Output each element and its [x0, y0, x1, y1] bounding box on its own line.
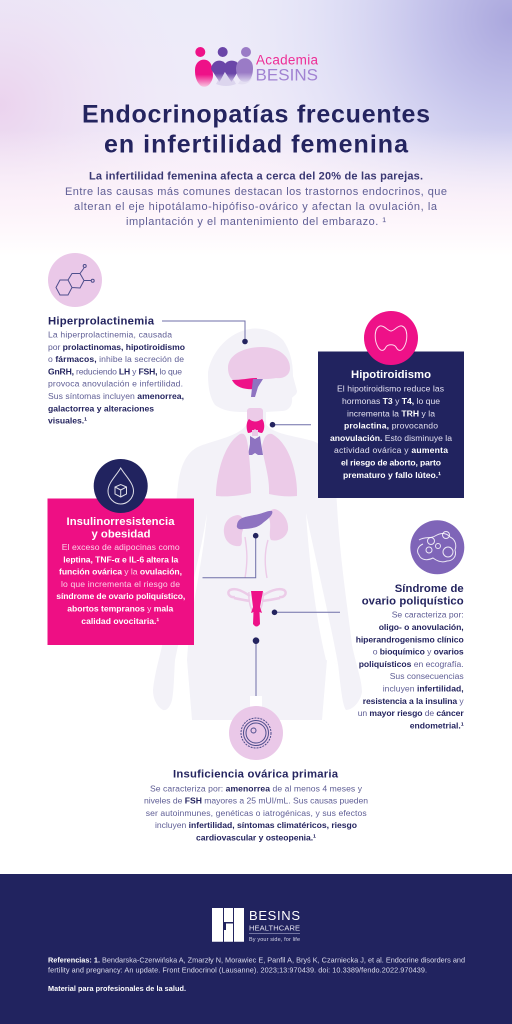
organ: lungs [216, 434, 297, 496]
body text [56, 542, 185, 626]
icon: drop with cube [94, 459, 148, 513]
intro text [65, 171, 447, 228]
panel: insulinorresistencia y obesidad [48, 459, 194, 645]
footer band [0, 874, 512, 1024]
body text: o bioquímico y ovarios [373, 647, 464, 657]
organ: thyroid and airways [247, 408, 264, 455]
body text: galactorrea y alteraciones [48, 403, 154, 413]
body text: función ovárica y la ovulación, [59, 567, 182, 577]
logo: Besins Healthcare [212, 908, 300, 943]
logo: Besins Healthcare: By your side, for life [249, 937, 300, 943]
body text: el riesgo de aborto, parto [341, 458, 441, 468]
body text: incluyen infertilidad, síntomas climatéricos, riesgo [155, 820, 357, 830]
body text [356, 610, 464, 730]
heading [362, 583, 464, 607]
body text: Sus consecuencias [390, 671, 464, 681]
body text: incrementa la TRH y la [347, 408, 435, 418]
organ: uterus [228, 589, 286, 626]
title: en infertilidad femenina [104, 130, 409, 158]
body text: El hipotiroidismo reduce las [337, 384, 444, 394]
references: Referencias: 1. Bendarska-Czerwińska A, Zmarzły N, Morawiec E, Panfil A, Bryś K, Czarniecka J, et al. Endocrine disorders and [48, 956, 465, 965]
connector: hipotiroidismo [270, 422, 311, 428]
body text [330, 384, 452, 480]
heading: Síndrome de [395, 583, 464, 595]
body text: anovulación. Esto disminuye la [330, 433, 452, 443]
body text: actividad ovárica y aumenta [334, 445, 448, 455]
panel: insuficiencia ovárica primaria [144, 706, 368, 842]
heading: y obesidad [92, 528, 151, 540]
connector: hiperprolactinemia [162, 321, 248, 344]
organ: brain [228, 347, 290, 397]
body text: provoca anovulación e infertilidad. [48, 379, 183, 389]
icon: thyroid [364, 311, 418, 365]
body text: Se caracteriza por: amenorrea de al menos 4 meses y [150, 783, 363, 793]
connector: síndrome de ovario poliquístico [272, 610, 340, 615]
body text: ser autoinmunes, genéticas o iatrogénicas, y sus efectos [146, 808, 367, 818]
body text: síndrome de ovario poliquístico, [56, 591, 185, 601]
heading: Insulinorresistencia [66, 516, 175, 528]
body text: cardiovascular y osteopenia.¹ [196, 832, 316, 842]
body text: por prolactinomas, hipotiroidismo [48, 342, 185, 352]
connector: insulinorresistencia [202, 533, 258, 578]
panel: síndrome de ovario poliquístico [356, 520, 464, 730]
body text: Sus síntomas incluyen amenorrea, [48, 391, 184, 401]
body text: lo que incrementa el riesgo de [61, 579, 180, 589]
logo: Besins Healthcare: BESINS [249, 908, 300, 923]
heading [66, 516, 175, 540]
logo: Academia Besins: Academia [256, 52, 318, 68]
body text: Se caracteriza por: [392, 610, 464, 620]
references [48, 956, 465, 974]
human body silhouette [153, 328, 362, 720]
intro text: Entre las causas más comunes destacan los trastornos endocrinos, que [65, 186, 447, 198]
body text [48, 330, 185, 426]
body text: prematuro y fallo lúteo.¹ [343, 470, 441, 480]
logo: Academia Besins: BESINS [256, 66, 318, 85]
title: Endocrinopatías frecuentes [82, 100, 430, 128]
heading: ovario poliquístico [362, 595, 464, 607]
body text: hormonas T3 y T4, lo que [342, 396, 440, 406]
icon: follicle [229, 706, 283, 760]
disclaimer: Material para profesionales de la salud. [48, 984, 186, 993]
body text: visuales.¹ [48, 416, 87, 426]
intro text: La infertilidad femenina afecta a cerca del 20% de las parejas. [89, 171, 423, 183]
body text [144, 783, 368, 842]
background gradient [0, 0, 512, 258]
body text: incluyen infertilidad, [383, 684, 464, 694]
body text: La hiperprolactinemia, causada [48, 330, 172, 340]
body text: prolactina, provocando [344, 421, 438, 431]
heading: Hiperprolactinemia [48, 315, 155, 327]
logo: Academia Besins [195, 47, 318, 87]
body text: o fármacos, inhibe la secreción de [48, 354, 184, 364]
body text: hiperandrogenismo clínico [356, 634, 464, 644]
body text: niveles de FSH mayores a 25 mUI/mL. Sus causas pueden [144, 796, 368, 806]
body text: resistencia a la insulina y [363, 696, 464, 706]
connector: insuficiencia ovárica [253, 637, 259, 696]
body text: poliquísticos en ecografía. [359, 659, 464, 669]
body text: un mayor riesgo de cáncer [358, 708, 464, 718]
panel: hipotiroidismo [318, 311, 464, 498]
body text: calidad ovocitaria.¹ [81, 616, 159, 626]
heading: Hipotiroidismo [351, 369, 431, 381]
icon: molecule [48, 253, 102, 307]
body text: GnRH, reduciendo LH y FSH, lo que [48, 366, 182, 376]
body text: El exceso de adipocinas como [62, 542, 180, 552]
body text: endometrial.¹ [410, 720, 464, 730]
logo: Besins Healthcare: HEALTHCARE [249, 924, 300, 932]
heading: Insuficiencia ovárica primaria [173, 769, 339, 781]
body text: abortos tempranos y mala [67, 604, 174, 614]
references: fertility and pregnancy: An update. Front Endocrinol (Lausanne). 2023;13:970439. doi: 10.3389/fendo.2022.970439. [48, 965, 427, 974]
body text: oligo- o anovulación, [379, 622, 464, 632]
organ: kidneys and pancreas [224, 509, 288, 578]
intro text: alteran el eje hipotálamo-hipófiso-ovárico y afectan la ovulación, la [74, 201, 438, 213]
body text: leptina, TNF-α e IL-6 altera la [63, 554, 179, 564]
icon: polycystic ovary [410, 520, 464, 574]
title [82, 100, 430, 158]
intro text: implantación y el mantenimiento del embarazo. ¹ [126, 216, 386, 228]
panel: hiperprolactinemia [48, 253, 185, 426]
